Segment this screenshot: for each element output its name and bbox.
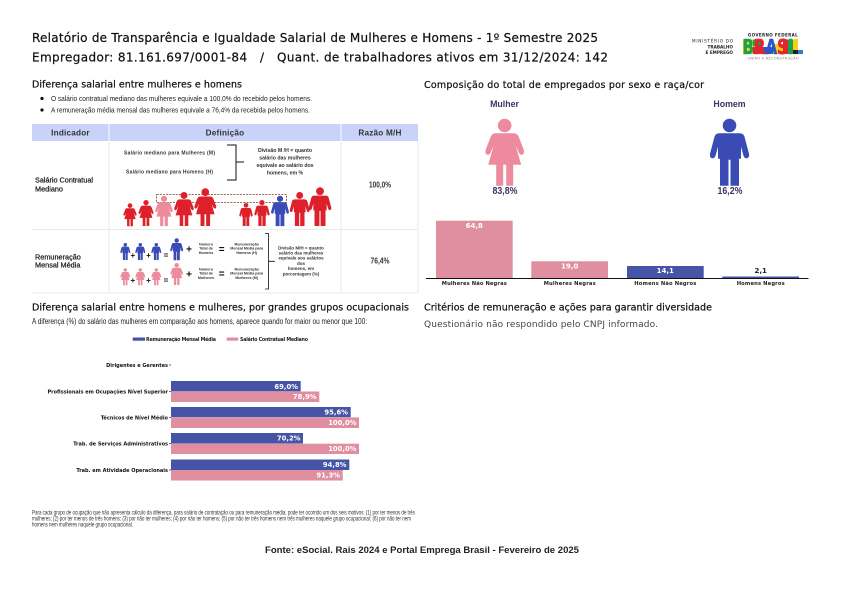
division explanation: equivale ao salário dos — [256, 163, 314, 169]
formula: men: = — [219, 244, 225, 256]
bars — [171, 381, 359, 480]
formula: men: + — [186, 244, 192, 256]
footnote: mulheres; (2) por ter menos de três homens; (3) por não ter mulheres; (4) por não ter homens; (5) por não ter três homens nem três mulheres naquele grupo ocupacional; (6) por não ter nem — [32, 516, 411, 522]
formula: women: + — [186, 270, 192, 280]
bar chart: composição por sexo e raça — [426, 221, 808, 287]
bar values: 70,2% — [277, 434, 301, 442]
row label: salário contratual mediano: Salário Contratual — [35, 175, 93, 184]
category labels: Trab. em Atividade Operacionais — [76, 468, 168, 474]
row label: remuneração mensal média: Mensal Média — [35, 260, 81, 270]
bar values: 69,0% — [274, 383, 298, 391]
bar chart: composição por sexo e raça: Mulheres Não Negras — [442, 281, 507, 287]
formula: men: + — [146, 251, 151, 260]
man share — [710, 99, 749, 197]
logo: Ministério do Trabalho e Governo Federal — [692, 32, 803, 61]
formula: women: Mulheres (M) — [235, 276, 259, 280]
division explanation: homens, em — [288, 266, 314, 271]
table header — [32, 124, 418, 141]
division explanation: salário das mulheres — [279, 250, 324, 256]
heading: grupos ocupacionais: Diferença salarial entre homens e mulheres, por grandes grupos ocupacionais — [32, 303, 409, 314]
formula: women: = — [164, 276, 169, 285]
table header: Razão M/H — [358, 128, 402, 138]
chart description: A diferença (%) do salário das mulheres em comparação aos homens, aparece quando for maior ou menor que 100: — [32, 317, 367, 326]
division explanation — [278, 245, 324, 277]
row label: salário contratual mediano: Mediano — [35, 184, 63, 193]
logo: Ministério do Trabalho e Governo Federal: BRASIL — [742, 35, 803, 59]
definition: salário mediano: Salário mediano para Mulheres (M) — [124, 151, 215, 157]
category labels: Dirigentes e Gerentes — [106, 363, 168, 369]
category labels: Técnicos de Nível Médio — [101, 414, 169, 421]
bar values: 100,0% — [328, 419, 357, 427]
heading: critérios: Critérios de remuneração e ações para garantir diversidade — [424, 303, 712, 314]
formula: women: + — [146, 276, 151, 285]
formula: women: Mensal Média para — [230, 272, 264, 276]
man share: Homem — [713, 99, 746, 109]
formula: men: Total de — [199, 247, 213, 251]
division explanation: salário das mulheres — [259, 156, 311, 162]
heading: composição: Composição do total de empregados por sexo e raça/cor — [424, 80, 704, 91]
ratio: 76,4%: 76,4% — [370, 255, 390, 265]
logo: Ministério do Trabalho e Governo Federal: GOVERNO FEDERAL — [748, 32, 798, 37]
division explanation — [256, 148, 314, 176]
source: Fonte: eSocial. Rais 2024 e Portal Emprega Brasil - Fevereiro de 2025 — [265, 545, 579, 555]
table header: Definição — [206, 128, 244, 138]
bar chart: composição por sexo e raça: Homens Não Negros — [634, 281, 696, 287]
title — [32, 31, 608, 64]
woman share — [485, 99, 524, 197]
bullet list: A remuneração média mensal das mulheres equivale a 76,4% da recebida pelos homens. — [51, 106, 310, 114]
footnote: Para cada grupo de ocupação que não apresenta cálculo da diferença, para salário de contratação ou para remuneração média, pode ter ocorrido um dos seis motivos: (1) por ter menos de três — [32, 510, 415, 516]
division explanation: dos — [297, 261, 305, 266]
division explanation: Divisão M /H = quanto — [258, 148, 312, 154]
footnote — [32, 510, 415, 528]
bar chart: composição por sexo e raça: 64,8 — [466, 222, 483, 230]
bullet list — [40, 94, 312, 114]
formula: men: Homens — [199, 251, 213, 255]
definition: salário mediano: Salário mediano para Homens (H) — [126, 170, 213, 176]
division explanation: porcentagem (%) — [283, 272, 320, 277]
formula: women: = — [219, 269, 225, 280]
table: indicador, definição, razão — [32, 124, 418, 293]
table header: Indicador — [51, 128, 90, 138]
bar values: 78,9% — [293, 393, 317, 401]
logo: Ministério do Trabalho e Governo Federal: TRABALHO — [708, 44, 733, 49]
formula: men: Número — [199, 242, 214, 246]
formula: men — [120, 238, 264, 260]
row label: remuneração mensal média — [35, 253, 81, 270]
row label: salário contratual mediano — [35, 175, 93, 193]
definition: salário mediano — [124, 151, 215, 176]
logo: Ministério do Trabalho e Governo Federal: MINISTÉRIO DO — [692, 39, 734, 44]
formula: women: Número — [199, 267, 214, 271]
category labels: Trab. de Serviços Administrativos — [73, 442, 168, 448]
formula: women: Mulheres — [198, 276, 214, 280]
division explanation: homens, em % — [267, 170, 304, 176]
questionnaire note: Questionário não respondido pelo CNPJ informado. — [424, 320, 658, 330]
bar chart: composição por sexo e raça: Homens Negros — [737, 281, 785, 287]
formula: men: + — [130, 251, 135, 260]
formula: men: Remuneração — [235, 242, 260, 246]
formula: men: = — [164, 251, 169, 260]
bar chart: composição por sexo e raça: 2,1 — [754, 267, 767, 275]
bar chart: composição por sexo e raça: 19,0 — [561, 263, 578, 271]
division explanation: Divisão M/H = quanto — [278, 245, 324, 250]
logo: Ministério do Trabalho e Governo Federal: UNIÃO E RECONSTRUÇÃO — [748, 56, 799, 61]
bar values: 95,6% — [324, 408, 348, 416]
formula: women — [120, 263, 264, 285]
bracket — [227, 145, 244, 180]
bullet list: O salário contratual mediano das mulheres equivale a 100,0% do recebido pelos homens. — [51, 94, 312, 103]
bar chart: composição por sexo e raça: 14,1 — [657, 267, 674, 275]
woman share: Mulher — [490, 99, 519, 109]
women figures — [123, 188, 216, 226]
formula: women: Total de — [199, 272, 213, 276]
chart legend: Salário Contratual Mediano — [240, 336, 309, 343]
dashed comparison box — [156, 194, 286, 202]
bar values: 94,8% — [323, 461, 347, 469]
chart legend: Remuneração Mensal Média — [146, 336, 216, 343]
man share: 16,2% — [718, 186, 743, 197]
bar chart: grupos ocupacionais — [47, 363, 359, 480]
logo: Ministério do Trabalho e Governo Federal: E EMPREGO — [706, 50, 733, 55]
ratio: 100,0%: 100,0% — [369, 179, 391, 189]
bracket — [265, 234, 275, 289]
chart legend — [133, 336, 309, 343]
title: Empregador: 81.161.697/0001-84 / Quant. de trabalhadores ativos em 31/12/2024: 142 — [32, 50, 608, 64]
heading: diferença salarial: Diferença salarial entre mulheres e homens — [32, 80, 242, 90]
bar values — [274, 383, 357, 480]
bar values: 100,0% — [328, 445, 357, 453]
title: Relatório de Transparência e Igualdade Salarial de Mulheres e Homens - 1º Semestre 2025 — [32, 31, 598, 45]
formula: women: Remuneração — [235, 267, 260, 271]
formula: women: + — [130, 276, 135, 285]
bar values: 91,3% — [316, 472, 340, 480]
footnote: homens nem mulheres naquele grupo ocupacional. — [32, 522, 133, 528]
formula: men: Mensal Média para — [230, 247, 264, 251]
bar chart: composição por sexo e raça: Mulheres Negras — [544, 281, 596, 287]
division explanation: equivale aos salários — [278, 256, 324, 261]
category labels — [47, 363, 169, 474]
category labels: Profissionais em Ocupações Nível Superior — [47, 389, 169, 396]
men figures — [239, 187, 331, 226]
woman share: 83,8% — [492, 186, 518, 197]
row label: remuneração mensal média: Remuneração — [35, 253, 81, 262]
formula: men: Homens (H) — [236, 251, 258, 255]
